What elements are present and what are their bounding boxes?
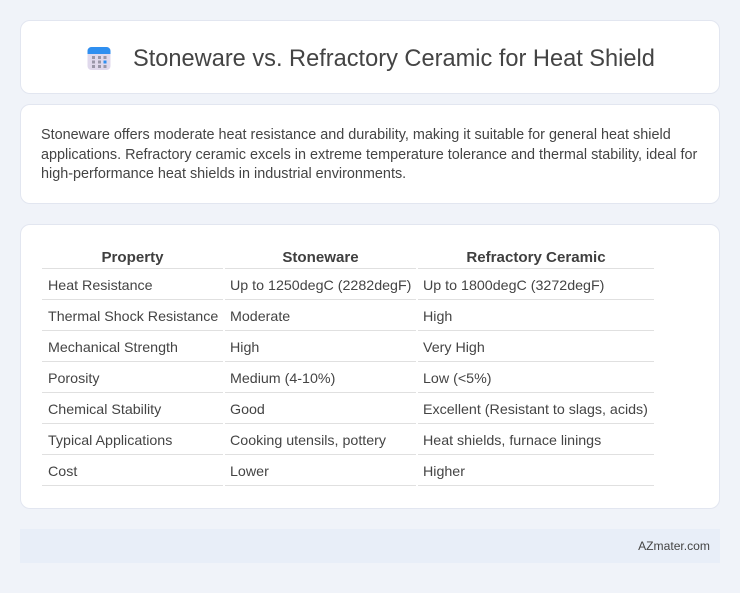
row: mechanical strength — [42, 340, 654, 362]
row: heat resistance: Heat Resistance — [48, 278, 153, 294]
row: thermal shock resistance — [42, 309, 654, 331]
row: heat resistance — [42, 278, 654, 300]
row: chemical stability: Excellent (Resistant to slags, acids) — [423, 402, 648, 418]
title: Stoneware vs. Refractory Ceramic for Heat Shield — [133, 46, 655, 72]
icon: calendar — [88, 47, 110, 70]
row: mechanical strength: Very High — [423, 340, 485, 356]
row: typical applications: Cooking utensils, pottery — [230, 433, 386, 449]
panel: summary — [20, 104, 720, 204]
row: porosity: Porosity — [48, 371, 99, 387]
table header: Property — [101, 249, 164, 266]
row: thermal shock resistance: High — [423, 309, 452, 325]
row: cost: Lower — [230, 464, 269, 480]
row: chemical stability: Chemical Stability — [48, 402, 161, 418]
row: chemical stability — [42, 402, 654, 424]
footer credit: AZmater.com — [638, 539, 710, 553]
row: cost: Cost — [48, 464, 77, 480]
row: typical applications — [42, 433, 654, 455]
row: chemical stability: Good — [230, 402, 265, 418]
row: cost — [42, 464, 654, 486]
row: porosity: Medium (4-10%) — [230, 371, 335, 387]
table header: Refractory Ceramic — [466, 249, 606, 266]
row: porosity: Low (<5%) — [423, 371, 492, 387]
footer bar — [20, 529, 720, 563]
table header: Stoneware — [282, 249, 359, 266]
summary text: high-performance heat shields in industrial environments. — [41, 166, 406, 182]
row: thermal shock resistance: Moderate — [230, 309, 290, 325]
row: thermal shock resistance: Thermal Shock Resistance — [48, 309, 218, 325]
row: porosity — [42, 371, 654, 393]
row: mechanical strength: Mechanical Strength — [48, 340, 178, 356]
summary text: Stoneware offers moderate heat resistance and durability, making it suitable for general heat shield — [41, 127, 671, 143]
row: heat resistance: Up to 1800degC (3272degF) — [423, 278, 604, 294]
panel: comparison table — [20, 224, 720, 509]
row: cost: Higher — [423, 464, 465, 480]
summary text — [41, 127, 698, 182]
row: typical applications: Typical Applications — [48, 433, 172, 449]
table header — [42, 249, 654, 269]
row: heat resistance: Up to 1250degC (2282degF) — [230, 278, 411, 294]
row: typical applications: Heat shields, furnace linings — [423, 433, 601, 449]
summary text: applications. Refractory ceramic excels in extreme temperature tolerance and thermal stability, ideal for — [41, 146, 697, 162]
panel: title header — [20, 20, 720, 94]
row: mechanical strength: High — [230, 340, 259, 356]
